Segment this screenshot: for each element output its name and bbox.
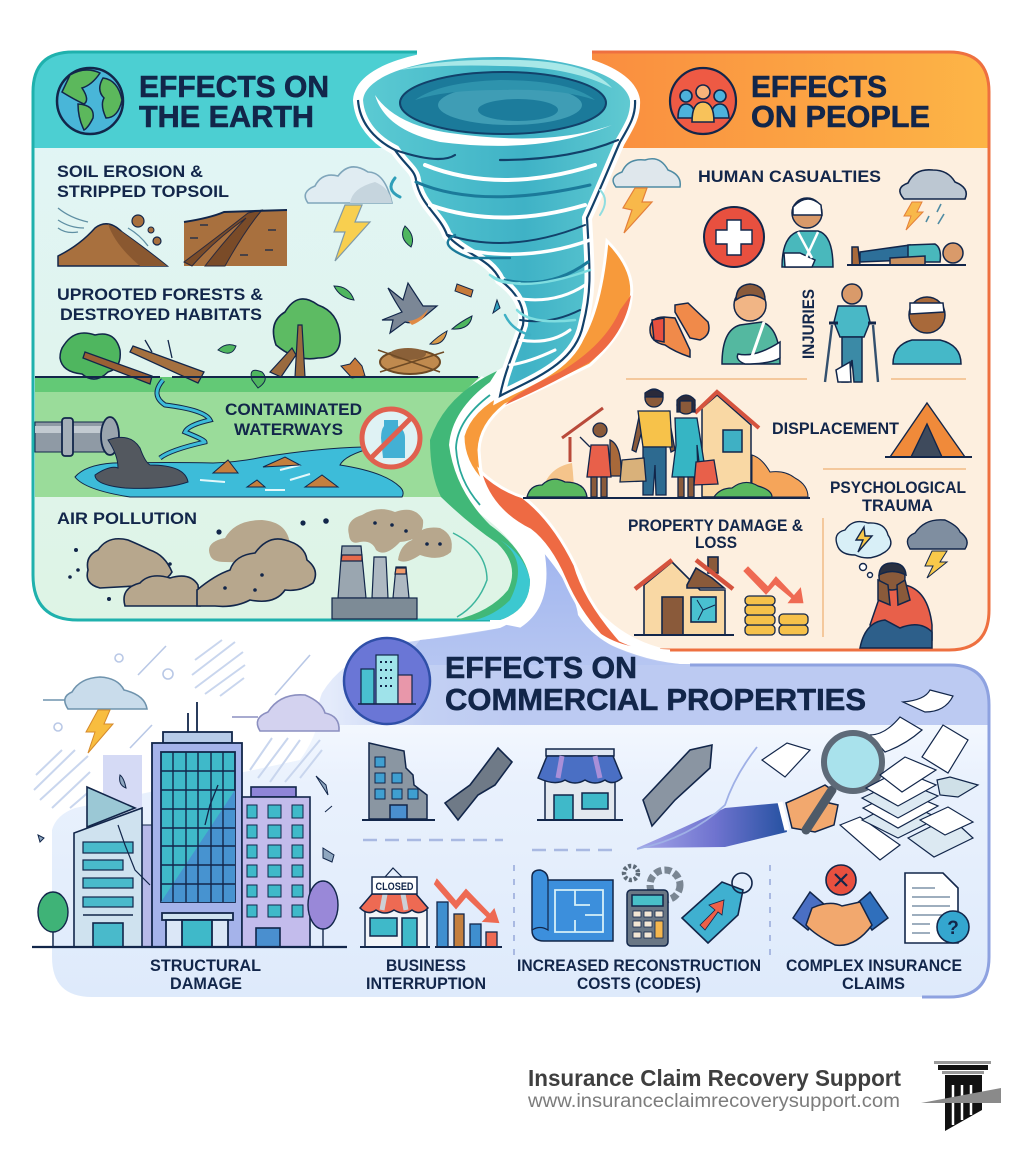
damaged house — [695, 392, 759, 497]
label: increased reconstruction costs — [517, 957, 761, 993]
label: displacement: DISPLACEMENT — [772, 420, 899, 438]
section: displacement — [523, 389, 972, 637]
icon: stacked papers — [762, 690, 978, 860]
red ribbon — [480, 471, 670, 651]
icon: bent beam two — [643, 745, 712, 826]
icon: factory — [332, 546, 417, 619]
icon: standing tree — [270, 299, 340, 377]
label: uprooted forests: UPROOTED FORESTS & — [57, 285, 263, 304]
woman figure — [672, 395, 718, 497]
dividers — [823, 469, 966, 637]
label: psychological trauma: TRAUMA — [862, 497, 933, 515]
label: contaminated waterways: WATERWAYS — [234, 420, 343, 439]
icon: stripped topsoil — [184, 210, 287, 266]
icon: question document: ? — [947, 918, 959, 939]
label: complex insurance claims — [786, 957, 962, 993]
icon: gears — [624, 866, 680, 900]
icon: magnifying glass — [806, 733, 882, 830]
icon: calculator — [627, 890, 668, 946]
icon: rain cloud right — [900, 170, 966, 230]
icon: nest — [378, 348, 444, 374]
heading: effects on commercial properties — [344, 638, 866, 724]
label: complex insurance claims: CLAIMS — [842, 975, 905, 993]
icon: head bandage person — [893, 297, 961, 364]
label: business interruption: BUSINESS — [386, 957, 466, 975]
people panel border — [590, 52, 989, 650]
back dust cloud — [209, 520, 290, 563]
thin curve near factory — [453, 533, 487, 617]
brand text: www.insuranceclaimrecoverysupport.com — [527, 1091, 900, 1112]
tornado funnel silhouette — [358, 52, 635, 396]
label: increased reconstruction costs: INCREASED RECONSTRUCTION — [517, 957, 761, 975]
bush right — [714, 482, 772, 497]
title text: EFFECTS ON — [139, 69, 329, 104]
title text: COMMERCIAL PROPERTIES — [445, 682, 866, 717]
icon: closed store — [360, 868, 430, 947]
orange ribbon — [463, 241, 632, 482]
tornado light rim swirl — [375, 95, 612, 146]
broken roof left — [562, 408, 603, 462]
label: soil erosion: SOIL EROSION & — [57, 162, 203, 181]
river — [75, 447, 403, 497]
commercial panel body — [52, 693, 989, 997]
section: psychological trauma — [830, 479, 967, 648]
white gap behind ribbons — [449, 378, 545, 626]
label: structural damage: DAMAGE — [170, 975, 242, 993]
tornado — [358, 49, 635, 396]
icon: thought bubble — [836, 522, 891, 578]
title text: ON PEOPLE — [751, 99, 930, 134]
icon: trees — [38, 881, 338, 947]
upper row: damaged structures — [362, 743, 770, 955]
section: complex insurance claims investigation — [637, 690, 978, 860]
title text — [445, 650, 866, 717]
section: air pollution — [57, 509, 452, 619]
icon: cloud left — [43, 677, 147, 753]
leaves and debris — [218, 226, 636, 388]
section: injuries — [626, 284, 966, 382]
stream — [157, 380, 210, 458]
sky motifs — [54, 646, 310, 748]
label: business interruption — [366, 957, 486, 993]
man figure — [620, 389, 675, 495]
ground — [523, 497, 810, 499]
white cap behind tornado rim — [417, 49, 592, 65]
icon: handshake — [793, 892, 888, 945]
icon: globe — [57, 68, 123, 134]
icon: lying person — [847, 243, 966, 265]
icon: distressed person — [860, 563, 932, 648]
water glints — [200, 465, 310, 490]
pale block behind left building — [103, 755, 142, 810]
section: business interruption — [360, 868, 502, 993]
label: structural damage: STRUCTURAL — [150, 957, 261, 975]
brand text: Insurance Claim Recovery Support — [528, 1065, 901, 1091]
icon: falling arrow — [745, 568, 802, 602]
icon: paper behind lens — [870, 717, 922, 752]
dust particles — [68, 518, 442, 601]
blue swoosh from tornado — [400, 552, 720, 665]
label: uprooted forests: DESTROYED HABITATS — [60, 305, 262, 324]
icon: man with arm sling — [722, 284, 780, 364]
tornado eye — [400, 72, 606, 134]
icon: coin stacks — [745, 596, 808, 635]
icon: storm cloud with lightning, earth side — [305, 167, 392, 261]
label: soil erosion: STRIPPED TOPSOIL — [57, 182, 229, 201]
green ribbon — [430, 371, 530, 620]
logo: column — [921, 1061, 1001, 1131]
label: structural damage — [150, 957, 261, 993]
label: psychological trauma — [830, 479, 966, 515]
label: human casualties: HUMAN CASUALTIES — [698, 168, 881, 186]
icon: tent — [885, 403, 972, 457]
people panel body — [468, 52, 989, 650]
title text: EFFECTS ON — [445, 650, 637, 685]
icon: lavender building — [242, 787, 310, 947]
icon: red x badge — [826, 865, 856, 895]
section: human casualties — [613, 159, 966, 267]
title text — [139, 69, 329, 134]
earth panel body — [33, 52, 540, 620]
vertical dashes — [514, 865, 770, 955]
heading: effects on the earth — [57, 68, 329, 134]
child figure — [580, 423, 621, 497]
brand text — [527, 1065, 901, 1112]
label: injuries rotated: INJURIES — [800, 289, 818, 359]
label: property damage and loss: PROPERTY DAMAGE & — [628, 517, 803, 535]
section: structural damage illustration — [32, 640, 347, 993]
title text — [751, 69, 930, 134]
earth panel border — [33, 52, 490, 620]
icon: cracked house — [634, 557, 734, 635]
hatched sky circles — [34, 640, 322, 808]
section: uprooted forests — [35, 226, 636, 388]
label: business interruption: INTERRUPTION — [366, 975, 486, 993]
lavender connector — [142, 825, 154, 947]
commercial panel border — [690, 665, 989, 997]
tornado outline — [358, 100, 635, 396]
stream water — [157, 380, 210, 458]
ground line — [35, 376, 478, 378]
icon: price tag — [682, 873, 752, 943]
panel: effects on the earth — [33, 52, 540, 620]
icon: dark cloud and lightning — [907, 520, 967, 578]
dashed dividers — [363, 840, 620, 850]
icon: fallen tree — [60, 333, 204, 384]
swirl ribbons — [430, 241, 670, 651]
icon: sleeve — [637, 803, 787, 848]
icon: falling bar chart — [435, 880, 502, 947]
label: property damage and loss: LOSS — [695, 534, 737, 552]
icon: factory smoke — [348, 509, 452, 562]
swoosh line — [637, 747, 757, 849]
icon: red cross — [704, 207, 764, 267]
icon: pollution pipe — [35, 417, 188, 488]
rubble right — [752, 455, 808, 497]
icon: closed store: CLOSED — [376, 881, 414, 893]
dividers — [626, 378, 966, 380]
title text: EFFECTS — [751, 69, 887, 104]
footer brand — [527, 1061, 1001, 1131]
label: property damage and loss — [628, 517, 803, 552]
rubble and bush left — [541, 463, 574, 497]
icon: soil mound — [58, 208, 167, 266]
commercial header band — [318, 628, 989, 725]
icon: hand and cuff — [780, 785, 838, 832]
icon: no bottle sign — [362, 409, 420, 467]
icon: bandage limb — [650, 303, 709, 357]
icon: storefront — [537, 749, 623, 820]
flying debris — [38, 775, 334, 862]
label: soil erosion — [57, 162, 229, 201]
icon: city buildings badge — [344, 638, 430, 724]
label: contaminated waterways — [225, 400, 362, 439]
panel: effects on people — [468, 52, 989, 650]
label: air pollution: AIR POLLUTION — [57, 509, 197, 528]
section: soil erosion — [57, 162, 287, 266]
teal lower ribbon — [475, 540, 530, 620]
icon: bent steel beam — [445, 748, 512, 820]
section: increased reconstruction costs — [517, 866, 761, 993]
heading: effects on people — [670, 68, 930, 134]
icon: cloud and lightning left — [613, 159, 680, 233]
section: complex insurance claims — [786, 865, 969, 993]
dark green strip — [35, 377, 480, 392]
label: complex insurance claims: COMPLEX INSURANCE — [786, 957, 962, 975]
icon: family and damaged house — [523, 389, 810, 498]
tornado swirl stripes — [395, 140, 618, 365]
icon: man on crutches — [825, 284, 878, 382]
section: contaminated waterways — [35, 380, 420, 497]
label: uprooted forests — [57, 285, 263, 324]
people header band — [560, 52, 989, 148]
thin teal line — [456, 395, 490, 505]
label: contaminated waterways: CONTAMINATED — [225, 400, 362, 419]
label: psychological trauma: PSYCHOLOGICAL — [830, 479, 966, 497]
icon: central glass tower — [152, 702, 242, 947]
ground line — [32, 946, 347, 948]
icon: dust clouds — [87, 539, 315, 606]
title text: THE EARTH — [139, 99, 314, 134]
icon: bird — [382, 283, 437, 333]
icon: people group — [670, 68, 736, 134]
label: increased reconstruction costs: COSTS (CODES) — [577, 975, 701, 993]
earth header band — [33, 52, 540, 148]
tornado outer arcs — [391, 178, 605, 335]
icon: cloud right — [232, 695, 339, 731]
section: property damage and loss — [628, 517, 808, 635]
icon: question document — [905, 873, 969, 943]
icon: blueprint — [532, 870, 613, 941]
rocks in river — [213, 457, 338, 487]
icon: left glass building — [74, 787, 150, 947]
panel: effects on commercial properties — [52, 552, 989, 997]
orange ribbon red edge — [505, 295, 631, 405]
icon: damaged building — [362, 743, 435, 820]
icon: bandaged person — [782, 198, 833, 267]
green field band — [35, 392, 464, 497]
